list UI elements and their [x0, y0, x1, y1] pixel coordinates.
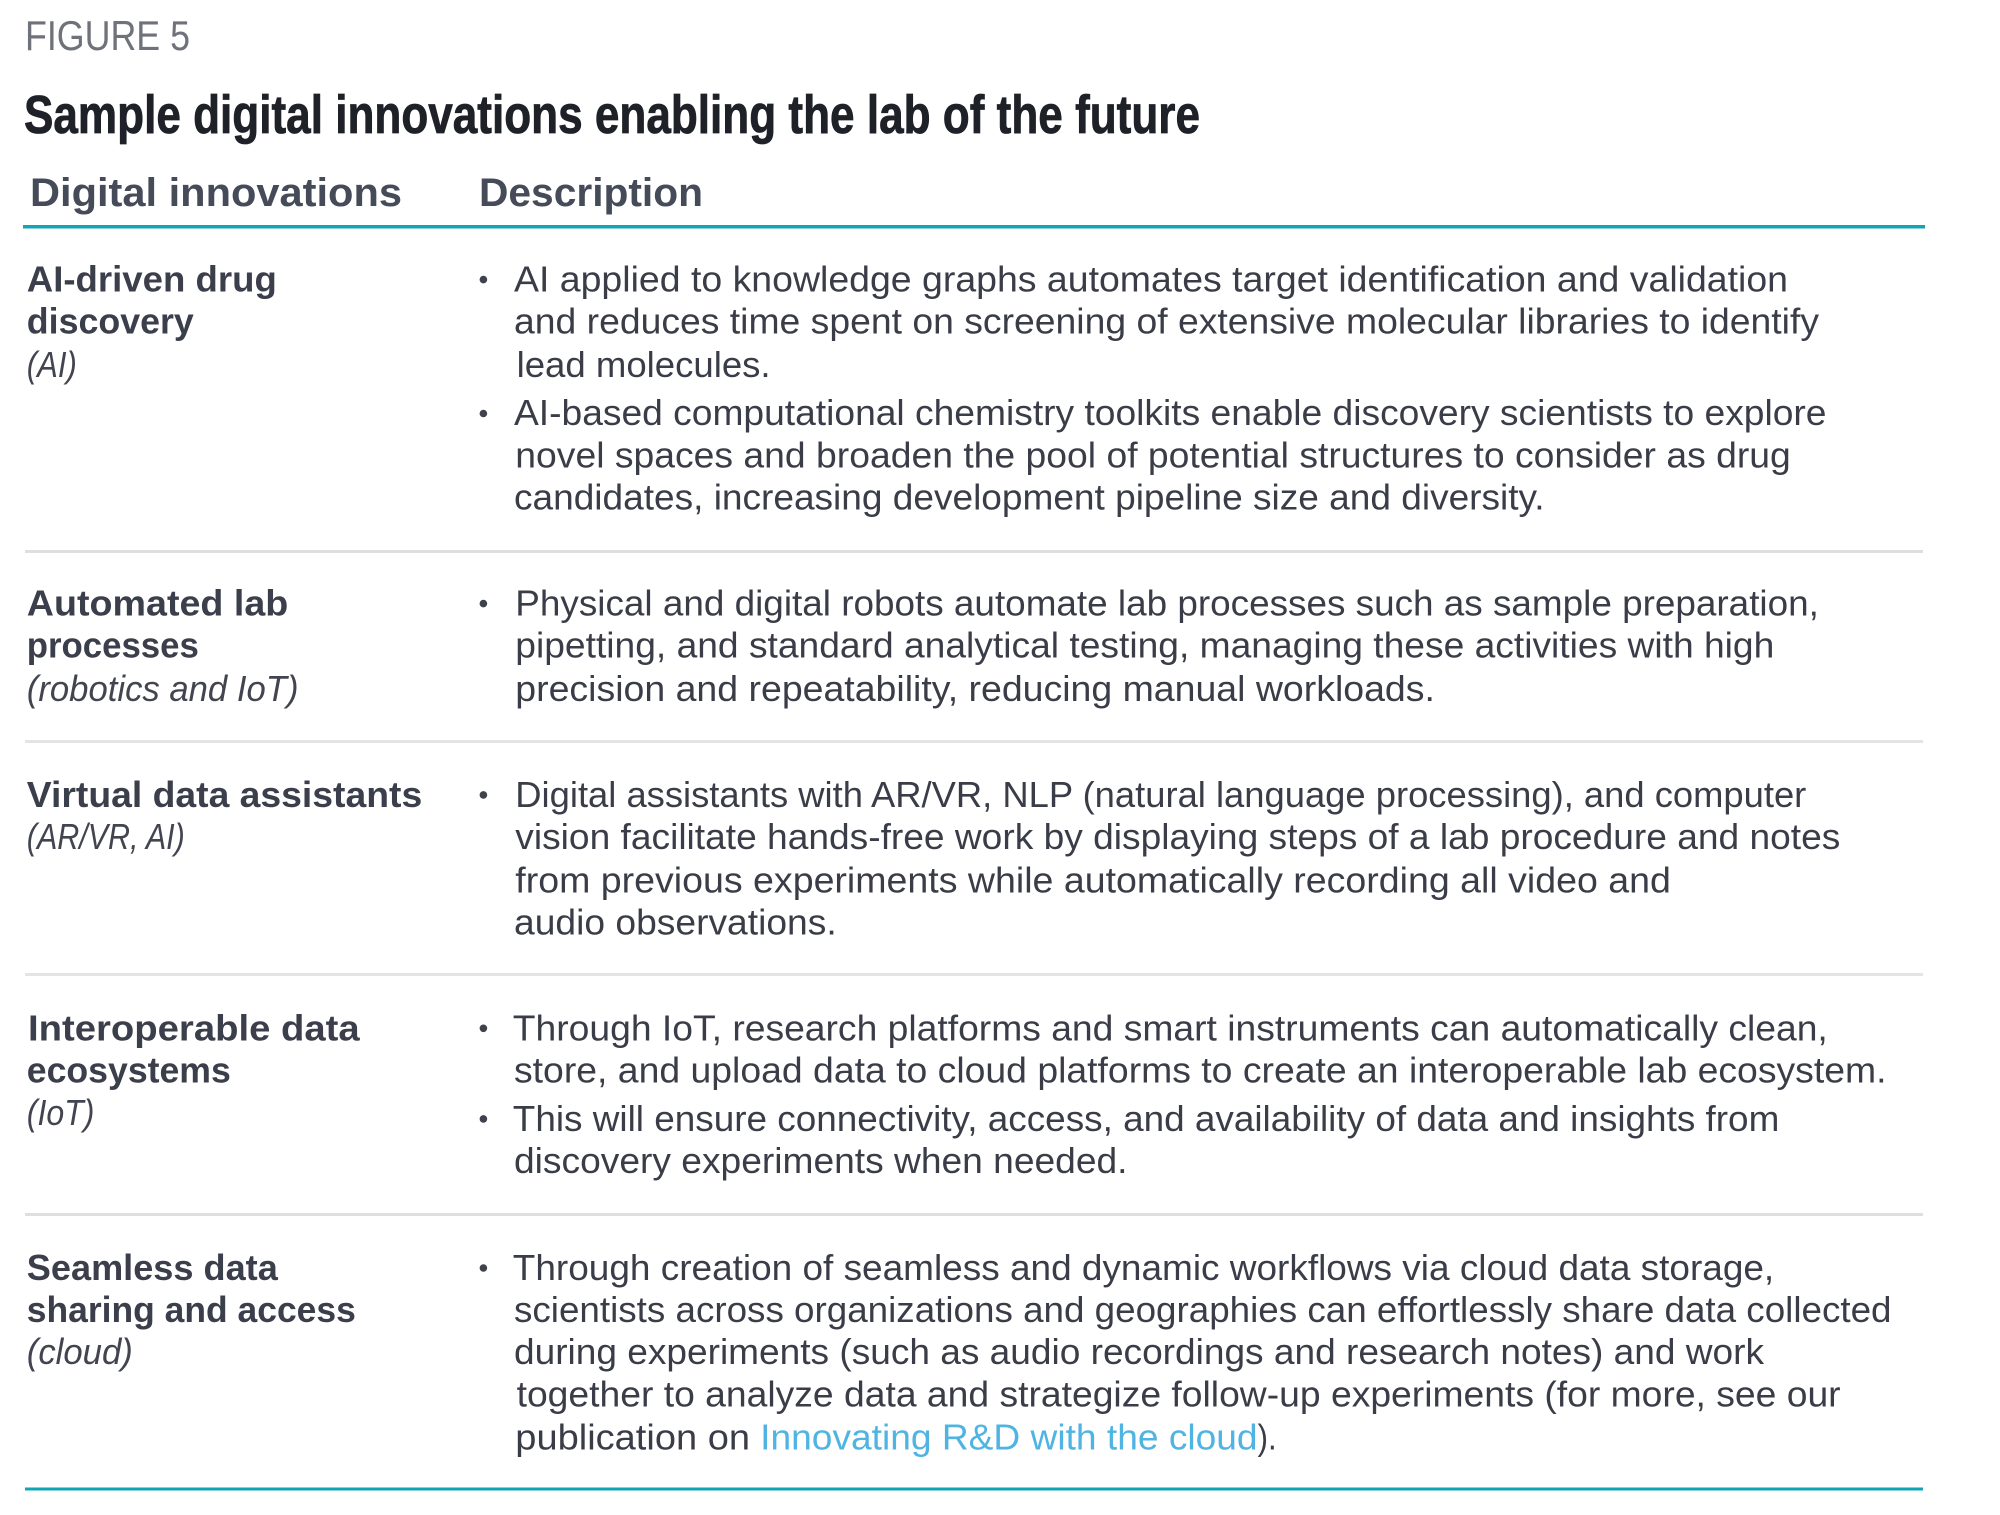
column heading: description: Description	[479, 171, 703, 215]
description bullet: precision and repeatability, reducing manual workloads.	[515, 668, 1435, 709]
description bullet: Through creation of seamless and dynamic workflows via cloud data storage,	[513, 1247, 1774, 1288]
description bullet 1	[480, 1007, 1887, 1090]
description bullet 2: novel spaces and broaden the pool of potential structures to consider as drug	[515, 435, 1791, 476]
description bullet: ).	[1258, 1417, 1277, 1458]
row heading: Seamless data	[27, 1247, 279, 1288]
description bullet: together to analyze data and strategize follow-up experiments (for more, see our	[517, 1373, 1841, 1414]
description bullet: from previous experiments while automatically recording all video and	[515, 859, 1671, 900]
description bullet: vision facilitate hands-free work by displaying steps of a lab procedure and notes	[515, 816, 1840, 857]
description bullet	[480, 1247, 1892, 1458]
row heading: Automated lab	[27, 583, 288, 624]
description bullet: Physical and digital robots automate lab processes such as sample preparation,	[515, 583, 1819, 624]
description bullet	[480, 583, 1819, 709]
title: Sample digital innovations enabling the lab of the future	[24, 85, 1200, 145]
row: AI-driven drug discovery	[27, 259, 1826, 518]
description bullet 2: discovery experiments when needed.	[514, 1140, 1128, 1181]
description bullet: Innovating R&D with the cloud	[760, 1417, 1258, 1458]
description bullet 2	[480, 392, 1827, 518]
row heading: (AR/VR, AI)	[27, 816, 185, 857]
table header	[30, 171, 703, 215]
row heading: discovery	[27, 301, 194, 342]
figure label: FIGURE 5	[25, 12, 190, 59]
row heading: ecosystems	[27, 1049, 231, 1090]
row heading: sharing and access	[27, 1289, 356, 1330]
description bullet: publication on	[515, 1417, 750, 1458]
row heading: Virtual data assistants	[27, 774, 422, 815]
description bullet: audio observations.	[514, 902, 837, 942]
row: automated lab processes	[27, 583, 1819, 709]
row heading	[27, 1007, 361, 1133]
row heading	[27, 774, 422, 857]
description bullet 2: This will ensure connectivity, access, and availability of data and insights from	[513, 1098, 1779, 1139]
row heading: Interoperable data	[28, 1007, 361, 1048]
description bullet 2: candidates, increasing development pipeline size and diversity.	[514, 477, 1545, 518]
description bullet: during experiments (such as audio recordings and research notes) and work	[514, 1331, 1765, 1372]
row heading: (AI)	[27, 344, 77, 385]
description bullet 1: Through IoT, research platforms and smart instruments can automatically clean,	[513, 1007, 1828, 1048]
description bullet: scientists across organizations and geographies can effortlessly share data collected	[514, 1289, 1892, 1330]
description bullet 1: AI applied to knowledge graphs automates target identification and validation	[514, 259, 1788, 300]
row heading: AI-driven drug	[27, 259, 277, 300]
row: interoperable data ecosystems	[27, 1007, 1886, 1181]
row heading: (IoT)	[27, 1092, 94, 1133]
row heading: (robotics and IoT)	[27, 668, 299, 709]
description bullet: Digital assistants with AR/VR, NLP (natural language processing), and computer	[515, 774, 1806, 815]
description bullet 2	[480, 1098, 1779, 1181]
description bullet 2: AI-based computational chemistry toolkits enable discovery scientists to explore	[514, 392, 1826, 433]
description bullet 1: store, and upload data to cloud platforms to create an interoperable lab ecosystem.	[514, 1049, 1886, 1090]
description bullet: pipetting, and standard analytical testing, managing these activities with high	[515, 625, 1774, 666]
description bullet	[480, 774, 1840, 942]
row heading: (cloud)	[27, 1331, 133, 1372]
row: seamless data sharing and access	[27, 1247, 1891, 1458]
column heading: digital innovations: Digital innovations	[30, 171, 402, 215]
row: virtual data assistants	[27, 774, 1840, 942]
row heading	[27, 583, 299, 709]
row heading	[27, 259, 277, 385]
description bullet 1	[480, 259, 1819, 385]
row heading	[27, 1247, 356, 1372]
description bullet 1: and reduces time spent on screening of extensive molecular libraries to identify	[514, 301, 1819, 342]
row heading: processes	[27, 625, 199, 666]
description bullet 1: lead molecules.	[517, 344, 771, 385]
